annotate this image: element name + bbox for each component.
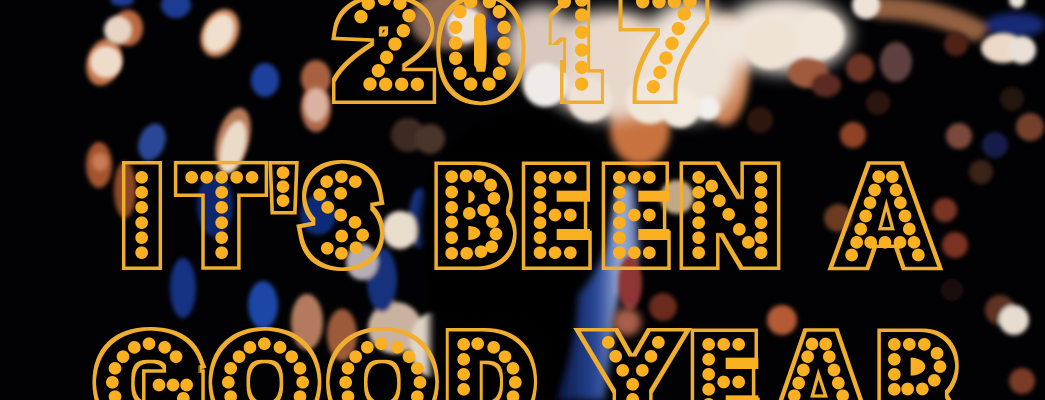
- title line: IT'S: I: [124, 145, 160, 286]
- title line: IT'S: T: [183, 146, 259, 286]
- title line: A: A: [840, 145, 931, 286]
- dots and bars: EEN: [534, 171, 767, 259]
- title line: BEEN: [439, 146, 778, 286]
- title line: BEEN: B: [439, 149, 510, 283]
- dots: 2017: [354, 0, 697, 93]
- title line: BEEN: E: [525, 150, 586, 283]
- dots and inner triangle: A: [845, 170, 925, 261]
- title line: GOOD: [99, 312, 532, 400]
- title line: YEAR: [590, 312, 953, 400]
- title line: 2017: [340, 0, 703, 120]
- the firework burst: [410, 0, 1045, 394]
- dots, bars and inner triangle: YEAR: [602, 336, 946, 400]
- title line: BEEN: N: [682, 146, 778, 286]
- title line: BEEN: E: [605, 149, 665, 283]
- person silhouette: [420, 113, 642, 400]
- dots: GOOD: [106, 337, 522, 400]
- title line: IT'S: ': [272, 145, 295, 286]
- title line: IT'S: [124, 145, 377, 286]
- title line: IT'S: S: [307, 148, 377, 283]
- dots: IT'S: [135, 166, 369, 260]
- dots: B: [445, 170, 502, 260]
